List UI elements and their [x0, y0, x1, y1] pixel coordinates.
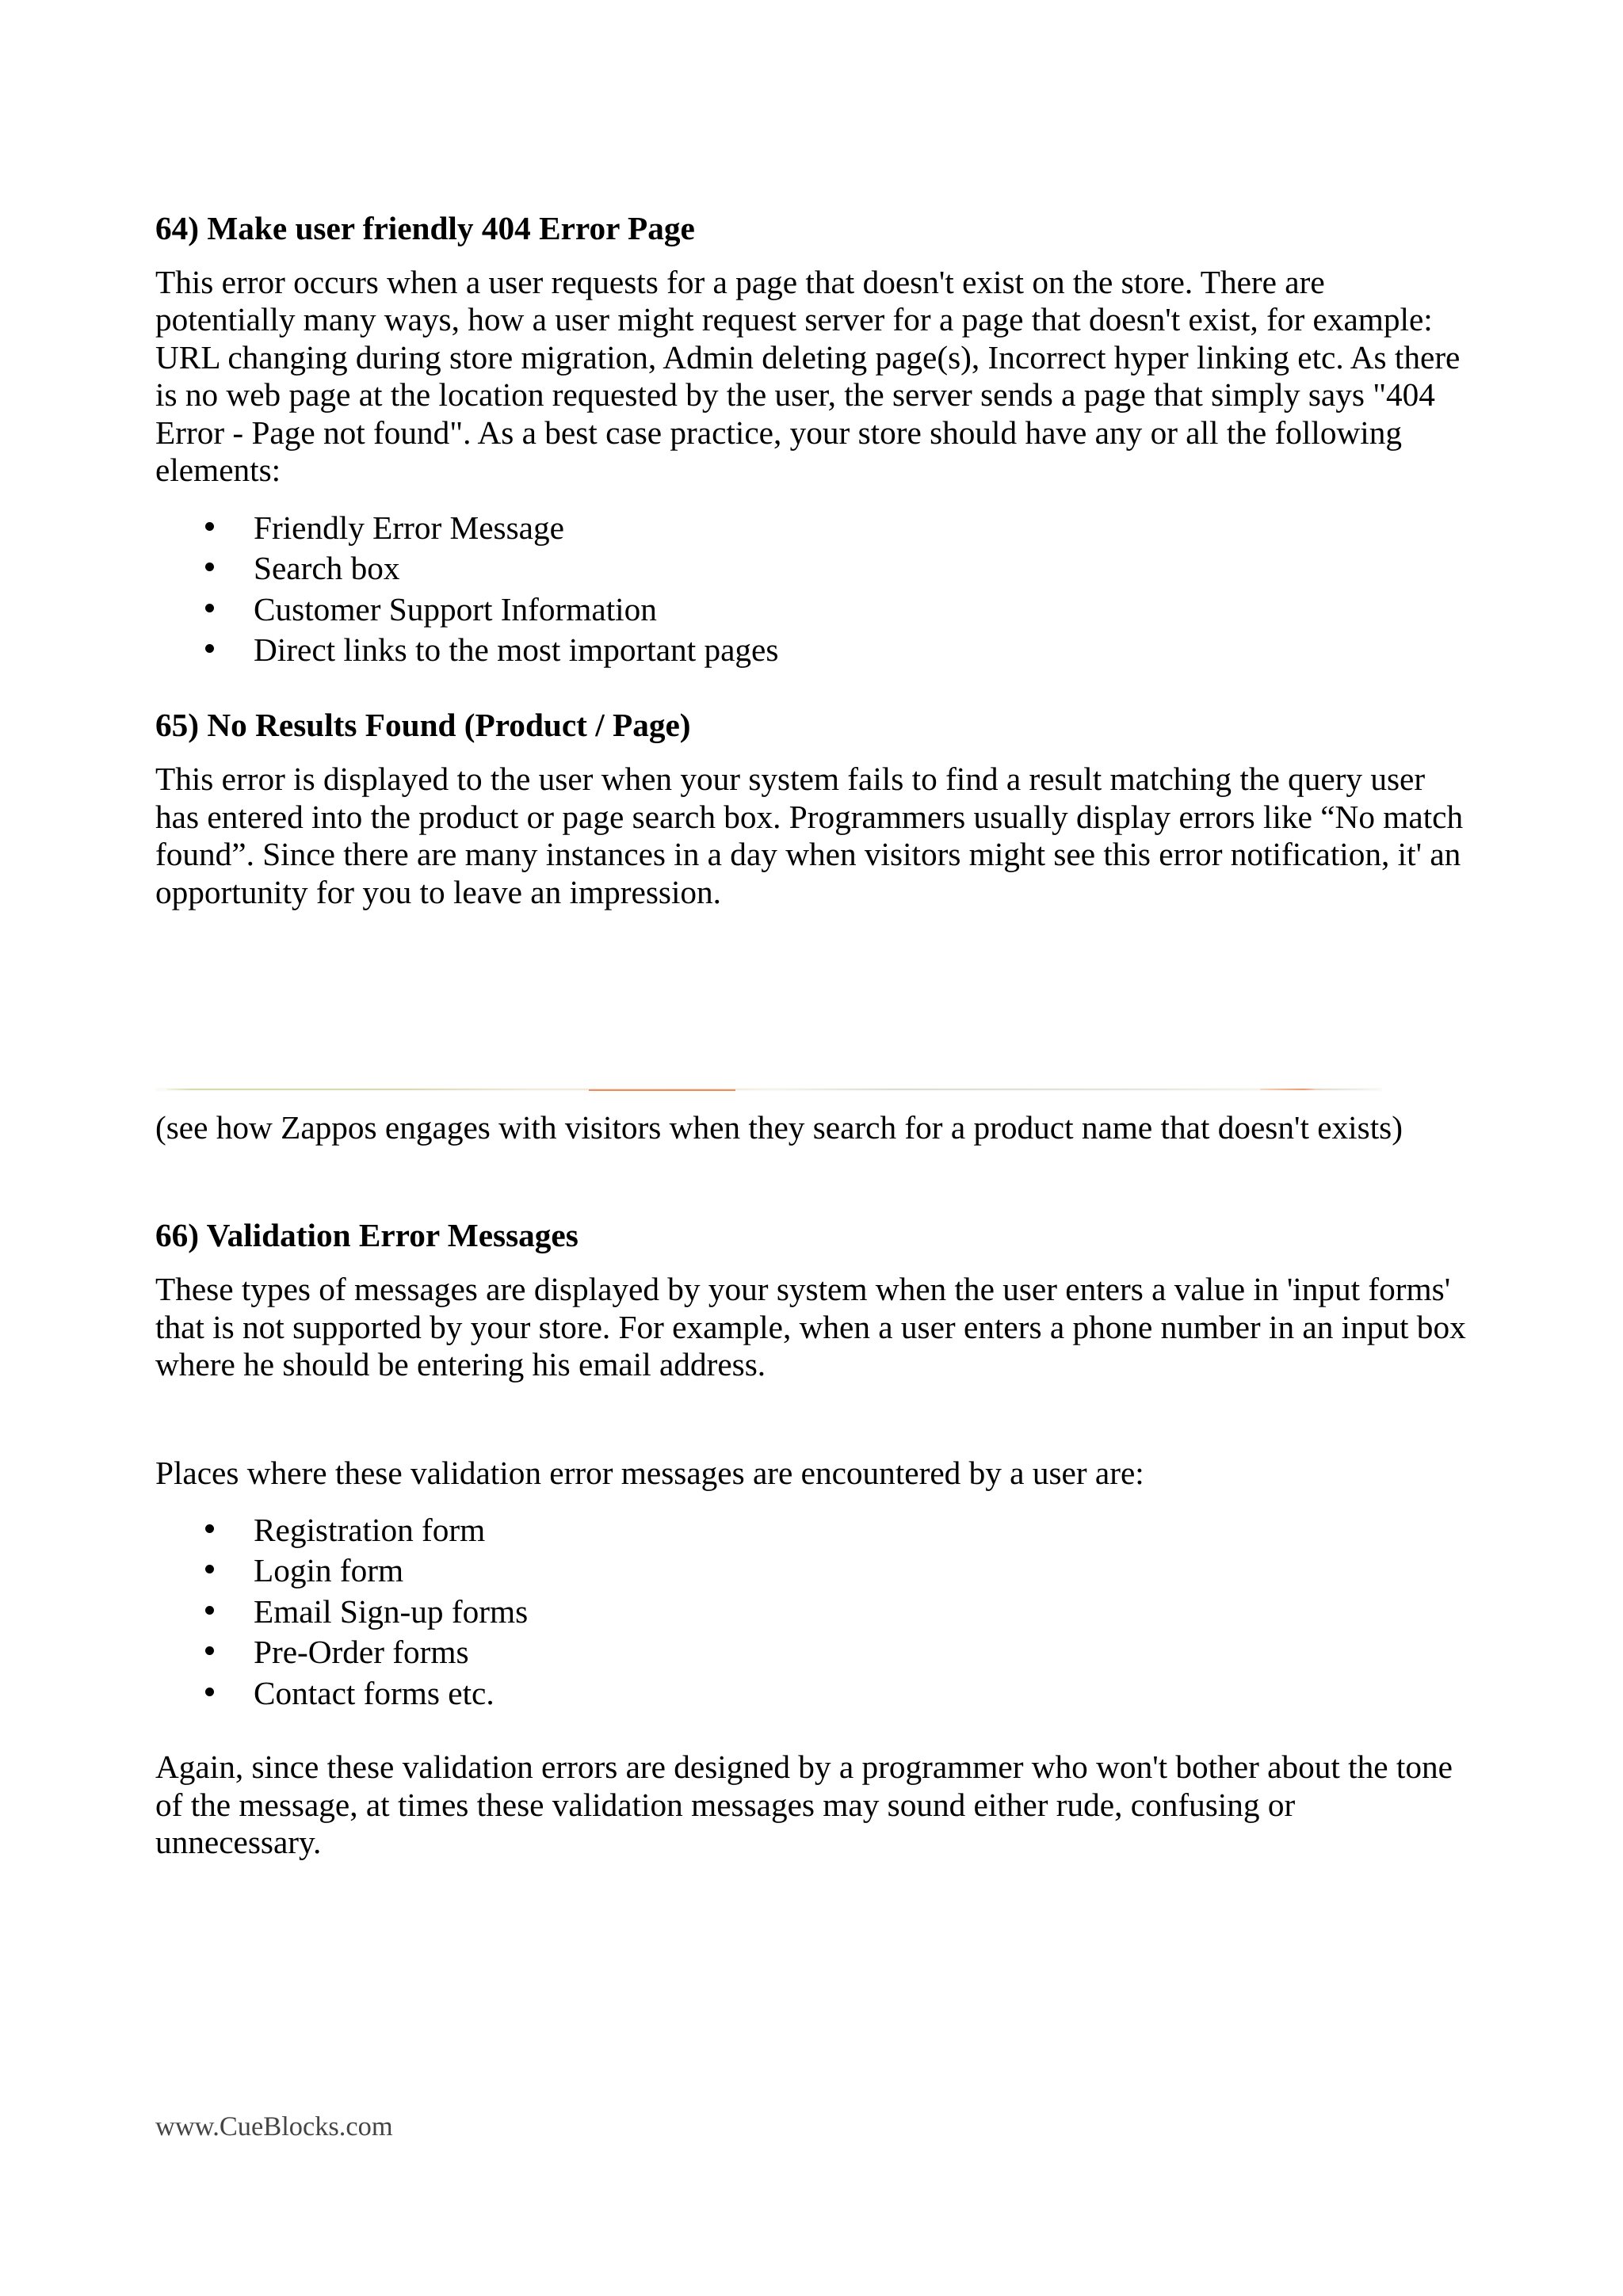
- text block: 404 error description: URL changing during store migration, Admin deleting page(s), Incorrect hyper linking etc. As there: [155, 339, 1460, 376]
- text block: closing note: unnecessary.: [155, 1824, 321, 1860]
- bullet list: validation forms: [205, 1512, 528, 1711]
- text block: 404 error description: Error - Page not found". As a best case practice, your store should have any or all the following: [155, 414, 1402, 450]
- bullet list: 404 page elements: Customer Support Information: [254, 591, 657, 627]
- heading: 64: 64) Make user friendly 404 Error Page: [155, 210, 695, 246]
- bullet list: validation forms: Contact forms etc.: [254, 1675, 495, 1711]
- bullet list: 404 page elements: Friendly Error Message: [254, 509, 564, 545]
- caption: Zappos example: (see how Zappos engages with visitors when they search for a product name that doesn't exists): [155, 1109, 1403, 1146]
- text block: no results description: found”. Since there are many instances in a day when visitors might see this error notification, it' an: [155, 836, 1461, 872]
- bullet list: 404 page elements: Direct links to the most important pages: [254, 631, 778, 668]
- heading: 66: 66) Validation Error Messages: [155, 1217, 579, 1253]
- text block: no results description: opportunity for you to leave an impression.: [155, 874, 721, 910]
- text block: 404 error description: elements:: [155, 452, 281, 488]
- bullet list: validation forms: Registration form: [254, 1512, 485, 1548]
- text block: 404 error description: [155, 263, 1460, 488]
- bullet list: validation forms: Email Sign-up forms: [254, 1593, 528, 1630]
- text block: validation errors description: that is not supported by your store. For example, when a user enters a phone number in an input box: [155, 1309, 1466, 1345]
- text block: 404 error description: is no web page at the location requested by the user, the server sends a page that simply says "404: [155, 376, 1435, 413]
- footer: website: www.CueBlocks.com: [155, 2111, 393, 2142]
- image strip: Zappos search screenshot: [155, 1088, 1382, 1091]
- text block: validation errors description: [155, 1271, 1466, 1383]
- text block: no results description: has entered into the product or page search box. Programmers usually display errors like “No match: [155, 799, 1463, 835]
- text block: validation errors description: These types of messages are displayed by your system when the user enters a value in 'input forms': [155, 1271, 1450, 1307]
- text block: 404 error description: potentially many ways, how a user might request server for a page that doesn't exist, for example:: [155, 301, 1433, 338]
- text block: closing note: Again, since these validation errors are designed by a programmer who won't bother about the tone: [155, 1749, 1453, 1785]
- text block: list intro: Places where these validation error messages are encountered by a user are:: [155, 1455, 1144, 1491]
- text block: closing note: of the message, at times these validation messages may sound either rude, confusing or: [155, 1786, 1295, 1822]
- text block: no results description: This error is displayed to the user when your system fails to find a result matching the query user: [155, 761, 1425, 797]
- heading: 65: 65) No Results Found (Product / Page): [155, 707, 691, 743]
- text block: validation errors description: where he should be entering his email address.: [155, 1346, 766, 1383]
- text block: closing note: [155, 1749, 1453, 1860]
- text block: no results description: [155, 761, 1463, 910]
- bullet list: 404 page elements: Search box: [254, 550, 399, 586]
- bullet list: validation forms: Login form: [254, 1552, 403, 1589]
- bullet list: 404 page elements: [205, 509, 778, 668]
- bullet list: validation forms: Pre-Order forms: [254, 1634, 469, 1670]
- text block: 404 error description: This error occurs when a user requests for a page that doesn't exist on the store. There are: [155, 263, 1325, 299]
